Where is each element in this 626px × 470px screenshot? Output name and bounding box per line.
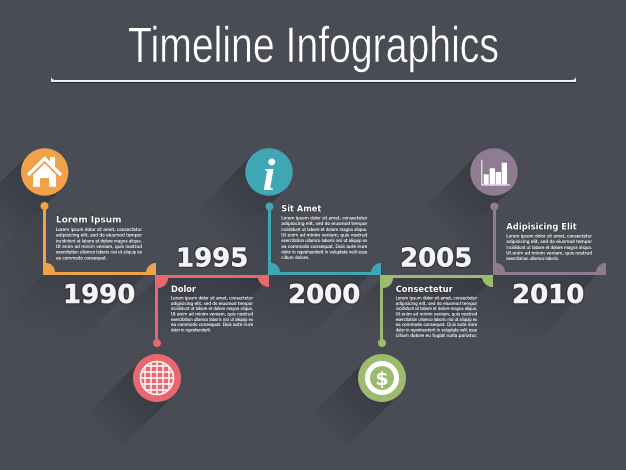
connector dot: 1990 — [40, 202, 48, 210]
panel: 2010 — [470, 148, 606, 310]
text block: Sit Amet: Lorem ipsum dolor sit amet, consectetur — [281, 216, 368, 220]
timeline bracket: 2000 — [268, 206, 381, 275]
text block: Dolor: adipisicing elit, sed do eiusmod tempor — [171, 301, 253, 306]
text block: Lorem Ipsum: incididunt ut labore et dolore magna aliqua. — [56, 238, 142, 243]
panel: 2000 — [245, 148, 381, 310]
panel: 1990 — [21, 148, 156, 310]
icon: bar chart — [470, 148, 518, 196]
heading: Sit Amet: Sit Amet — [281, 205, 321, 215]
year: 2005: 2005 — [400, 244, 472, 274]
text block: Dolor: incididunt ut labore et dolore magna aliqua. — [171, 306, 253, 311]
heading: Lorem Ipsum: Lorem Ipsum — [56, 216, 122, 226]
connector dot: 1995 — [153, 339, 161, 347]
title underline — [51, 77, 576, 83]
text block: Sit Amet: cillum dolore. — [281, 255, 309, 260]
text block: Adipisicing Elit: Lorem ipsum dolor sit amet, consectetur — [506, 234, 592, 238]
text block: Dolor: exercitation ullamco laboris nisi ut aliquip ex — [171, 317, 254, 322]
year: 2010: 2010 — [512, 280, 584, 310]
text block: Adipisicing Elit: adipisicing elit, sed do eiusmod tempor — [506, 239, 592, 244]
text block: Sit Amet: ea commodo consequat. Duis aute irure — [281, 244, 368, 249]
text block: Sit Amet: adipisicing elit, sed do eiusmod tempor — [281, 221, 368, 226]
panel: 1995 — [133, 244, 269, 402]
text block: Sit Amet — [281, 216, 368, 260]
text block: Adipisicing Elit: incididunt ut labore et dolore magna aliqua. — [506, 245, 592, 250]
text block: Consectetur: exercitation ullamco laboris nisi ut aliquip ex — [396, 317, 478, 322]
text block: Dolor — [171, 296, 254, 332]
timeline bracket: 1990 — [43, 206, 156, 275]
text block: Dolor: Lorem ipsum dolor sit amet, consectetur — [171, 296, 253, 300]
text block: Lorem Ipsum: adipisicing elit, sed do eiusmod tempor — [56, 233, 142, 238]
text block: Dolor: dolor in reprehenderit. — [171, 328, 211, 332]
heading: Adipisicing Elit: Adipisicing Elit — [506, 223, 577, 233]
text block: Consectetur: adipisicing elit, sed do eiusmod tempor — [396, 301, 478, 306]
text block: Sit Amet: dolor in reprehenderit in voluptate velit esse — [281, 250, 368, 254]
connector dot: 2005 — [378, 339, 386, 347]
timeline bracket: 1995 — [155, 275, 269, 339]
icon: dollar — [358, 354, 406, 402]
icon: dollar: $ — [375, 368, 389, 390]
year: 2000: 2000 — [288, 280, 360, 310]
text block: Consectetur: dolor in reprehenderit in voluptate velit esse — [396, 328, 478, 332]
text block: Sit Amet: Ut enim ad minim veniam, quis nostrud — [281, 232, 368, 238]
text block: Consectetur — [396, 296, 478, 338]
text block: Lorem Ipsum — [56, 227, 143, 260]
title: Timeline Infographics — [128, 17, 499, 73]
text block: Lorem Ipsum: ea commodo consequat. — [56, 255, 107, 260]
icon: info — [245, 148, 293, 200]
text block: Dolor: ea commodo consequat. Duis aute irure — [171, 322, 254, 327]
icon: info: i — [263, 149, 276, 200]
text block: Consectetur: incididunt ut labore et dolore magna aliqua. — [396, 306, 477, 311]
text block: Dolor: Ut enim ad minim veniam, quis nostrud — [171, 312, 253, 316]
icon: globe — [133, 354, 181, 402]
text block: Lorem Ipsum: Lorem ipsum dolor sit amet, consectetur — [56, 227, 142, 232]
text block: Lorem Ipsum: exercitation ullamco laboris nisi ut aliquip ex — [56, 250, 143, 255]
connector dot: 2000 — [266, 202, 274, 210]
connector dot: 2010 — [490, 202, 498, 210]
text block: Lorem Ipsum: Ut enim ad minim veniam, quis nostrud — [56, 244, 142, 249]
long shadows — [0, 155, 606, 452]
text block: Sit Amet: incididunt ut labore et dolore magna aliqua. — [281, 227, 367, 232]
text block: Adipisicing Elit: exercitation ullamco laboris. — [506, 256, 559, 261]
year: 1990: 1990 — [63, 280, 135, 310]
text block: Adipisicing Elit — [506, 234, 592, 261]
timeline bracket: 2005 — [380, 275, 493, 339]
text block: Consectetur: Lorem ipsum dolor sit amet, consectetur — [396, 296, 478, 300]
text block: Consectetur: cillum dolore eu fugiat nulla pariatur. — [396, 333, 477, 338]
timeline bracket: 2010 — [493, 206, 606, 275]
text block: Adipisicing Elit: Ut enim ad minim veniam, quis nostrud — [506, 250, 592, 256]
panel: 2005 — [358, 244, 493, 402]
text block: Sit Amet: exercitation ullamco laboris nisi ut aliquip ex — [281, 238, 368, 243]
year: 1995: 1995 — [176, 244, 248, 274]
text block: Consectetur: ea commodo consequat. Duis aute irure — [396, 322, 478, 327]
icon: home — [21, 148, 68, 196]
heading: Dolor: Dolor — [171, 285, 197, 295]
heading: Consectetur: Consectetur — [396, 285, 453, 295]
text block: Consectetur: Ut enim ad minim veniam, quis nostrud — [396, 312, 478, 316]
